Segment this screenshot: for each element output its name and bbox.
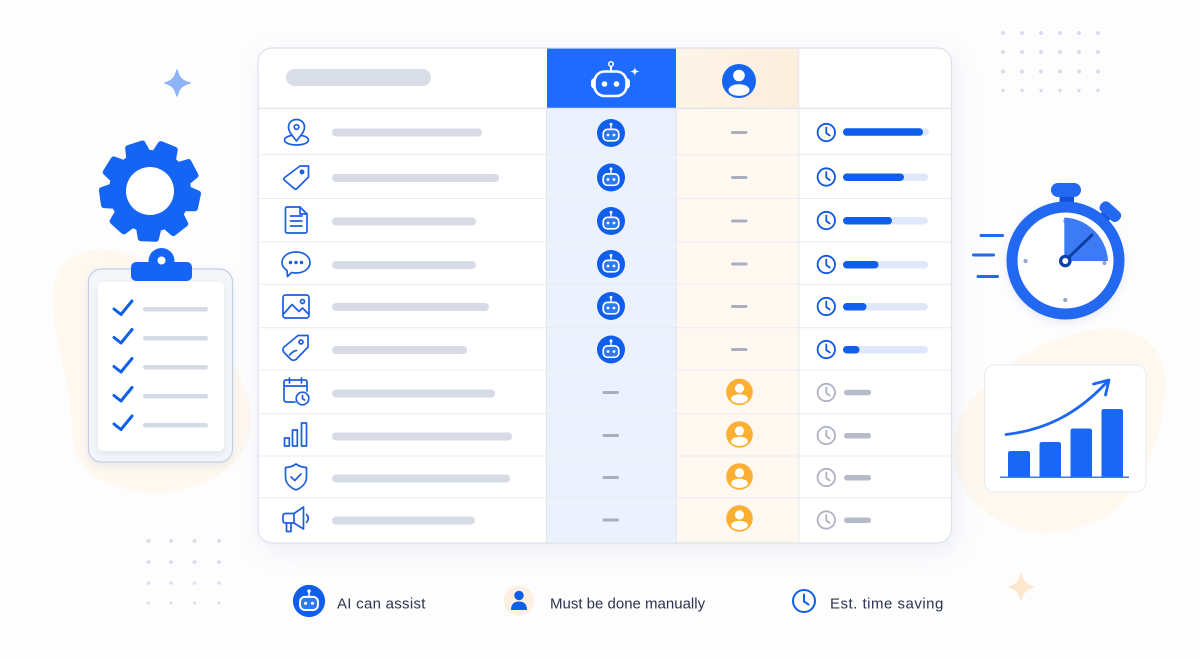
legend item: must be done manually: Must be done manually: [550, 596, 706, 612]
growth arrow: [1006, 383, 1106, 434]
clipboard paper: [98, 282, 224, 451]
icon: gear: [98, 139, 202, 242]
icon: speech bubble: [282, 252, 310, 276]
dots: top right: [1001, 31, 1100, 92]
blob: right peach: [953, 329, 1165, 532]
icon: signal bars: [284, 423, 306, 446]
AI column: robot badges: [597, 119, 625, 364]
icon: megaphone: [283, 507, 308, 532]
AI column: dashes: [602, 391, 619, 522]
row label placeholders: [332, 128, 512, 524]
crown: [1060, 195, 1074, 207]
time column: progress bars: [843, 128, 929, 523]
clipboard: [88, 248, 232, 462]
clipboard board: [88, 269, 232, 462]
header label placeholder: [286, 69, 431, 86]
column: AI background: [547, 108, 676, 543]
time column: clocks: [818, 124, 835, 529]
speed lines: [974, 236, 1002, 276]
elapsed wedge: [1064, 218, 1108, 261]
legend item: AI can assist: [293, 585, 426, 617]
icon: shield check: [286, 464, 306, 490]
header: manual cell: [676, 48, 799, 108]
icon: price tag: [283, 336, 308, 360]
manual column: dashes: [731, 131, 748, 351]
manual column: person badges: [726, 379, 753, 532]
hand: [1065, 235, 1092, 261]
legend item: est. time saving: Est. time saving: [830, 596, 944, 612]
baseline: [1000, 476, 1129, 478]
table panel: [258, 48, 952, 543]
blob: left peach: [53, 249, 251, 493]
clipboard clip: [131, 248, 192, 281]
sparkle: blue: [165, 70, 190, 96]
dots: bottom left: [146, 539, 221, 604]
tick dots: [1023, 219, 1107, 302]
header: AI cell: [547, 48, 676, 108]
icon: header robot: [591, 62, 640, 96]
checklist: [114, 301, 208, 430]
chart card: [984, 365, 1146, 492]
legend item: est. time saving: [793, 590, 944, 612]
column: manual background: [676, 108, 799, 543]
icon: document: [286, 207, 307, 233]
icon: header person: [722, 64, 756, 98]
icon: calendar with clock: [284, 378, 309, 405]
icon: image: [283, 295, 309, 318]
bars: [1008, 409, 1123, 477]
legend item: AI can assist: AI can assist: [337, 596, 426, 612]
icon: tag: [284, 166, 308, 189]
icon: stopwatch: [974, 183, 1123, 314]
icon: location pin: [284, 120, 308, 145]
side button: [1092, 199, 1123, 230]
sparkle: peach: [1009, 574, 1033, 600]
row icons: [282, 120, 310, 532]
legend item: must be done manually: [504, 586, 706, 616]
legend: [293, 585, 944, 617]
dial: [1012, 207, 1119, 314]
